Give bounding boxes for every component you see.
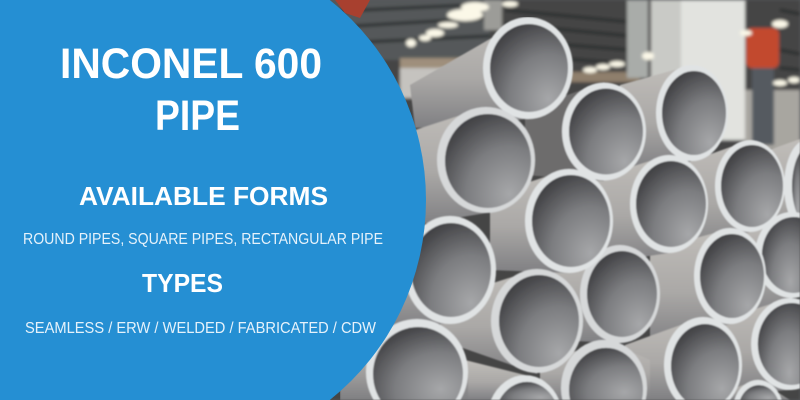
heading: available forms: AVAILABLE FORMS: [79, 181, 328, 211]
pipe: [700, 380, 790, 400]
pipe: [540, 340, 650, 400]
pipe: [650, 228, 766, 345]
pipe: [410, 17, 573, 128]
pipe: [550, 245, 660, 343]
title: INCONEL 600: [60, 40, 322, 88]
red hoist at top: [335, 0, 370, 18]
types list: SEAMLESS / ERW / WELDED / FABRICATED / CDW: [25, 320, 377, 337]
pipe: [590, 155, 708, 265]
pipe: [625, 317, 742, 400]
title: PIPE: [155, 92, 240, 140]
pipe: [380, 216, 496, 330]
pipe: [440, 269, 583, 374]
pipe: [722, 212, 800, 320]
pipe: [720, 298, 800, 395]
pipe: [680, 140, 785, 255]
pipe: [490, 169, 613, 273]
pipe: [465, 360, 563, 400]
pipe: [620, 65, 728, 170]
title: [60, 40, 322, 140]
blue circular panel: [0, 0, 426, 400]
warehouse background: [320, 0, 800, 400]
stack of steel pipes: [340, 17, 800, 400]
pipe: [340, 319, 468, 400]
pipe: [735, 139, 800, 258]
pipe: [415, 107, 535, 225]
pipe: [525, 82, 646, 181]
forms list: ROUND PIPES, SQUARE PIPES, RECTANGULAR PIPE: [23, 231, 383, 248]
heading: types: TYPES: [142, 268, 223, 298]
